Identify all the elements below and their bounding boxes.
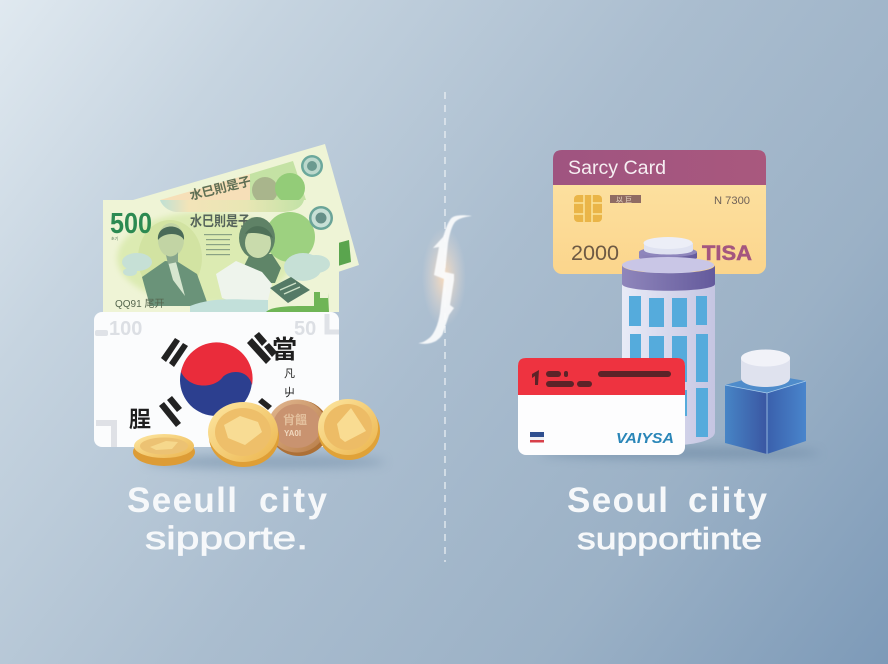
card label: 以 巨 xyxy=(616,196,632,204)
guilloche rosette xyxy=(265,212,315,262)
front banknote xyxy=(103,200,339,312)
coin: copper xyxy=(268,400,329,456)
note heading: 水巳則是子 xyxy=(190,213,250,229)
coin: right gold xyxy=(318,399,380,460)
portrait: woman xyxy=(239,217,281,283)
magnetic text bars xyxy=(532,370,671,387)
sandy card xyxy=(553,150,766,274)
right subtitle: supportinte xyxy=(577,521,762,556)
note emblem xyxy=(270,277,310,303)
note value: 500 xyxy=(110,208,152,240)
back note seal xyxy=(301,155,323,177)
panel: cash illustration xyxy=(94,144,385,469)
right title: ciity xyxy=(688,481,768,520)
card chip xyxy=(574,195,602,222)
card title: Sarcy Card xyxy=(568,158,666,179)
left title: city xyxy=(259,481,328,520)
caption: left xyxy=(127,481,328,556)
coin: copper: 肖饂 xyxy=(283,412,307,427)
icon: lightning bolt with glow xyxy=(418,215,472,344)
caption: right xyxy=(567,481,768,556)
red and white card xyxy=(518,358,685,455)
official seal xyxy=(309,206,333,230)
korean characters: 當 xyxy=(272,336,297,364)
card brand: TISA xyxy=(702,242,752,265)
coin: large gold xyxy=(208,402,279,467)
faded values: 100 xyxy=(109,318,142,340)
tower xyxy=(622,237,715,446)
right title: Seoul xyxy=(567,481,668,520)
left subtitle: sipporte. xyxy=(145,520,308,556)
taegeuk xyxy=(180,342,253,416)
card brand: VAIYSA xyxy=(616,430,674,447)
sandy card: 2000 xyxy=(571,242,619,265)
white flag card: 凡 xyxy=(284,368,295,380)
blue cube xyxy=(725,350,806,454)
portrait: man xyxy=(142,223,207,306)
coin: copper: YA0I xyxy=(284,429,301,438)
left title: Seeull xyxy=(127,481,237,520)
floor shadow xyxy=(540,447,820,459)
mini flag xyxy=(530,432,544,442)
white flag card xyxy=(94,312,339,447)
back banknote: 水巳則是子 xyxy=(188,173,253,203)
trigrams xyxy=(159,332,277,427)
tower windows xyxy=(629,296,708,440)
front banknote: 초기 xyxy=(111,235,119,241)
central dashed divider xyxy=(444,92,446,562)
temple illustration xyxy=(190,261,272,312)
card label xyxy=(610,195,641,204)
coin: small flat xyxy=(133,434,195,466)
back banknote xyxy=(133,144,359,272)
white flag card: 脭 xyxy=(129,407,151,432)
panel: cards and tower illustration xyxy=(518,150,820,459)
pattern clouds xyxy=(122,253,330,281)
card number: N 7300 xyxy=(714,195,750,207)
coin shadow xyxy=(145,455,385,469)
green corner block xyxy=(266,292,329,312)
white flag card: 屮 xyxy=(284,386,295,399)
micro text lines xyxy=(204,234,232,255)
white flag card: 50 xyxy=(294,318,316,340)
serial: QQ91 尾开 xyxy=(115,298,164,310)
